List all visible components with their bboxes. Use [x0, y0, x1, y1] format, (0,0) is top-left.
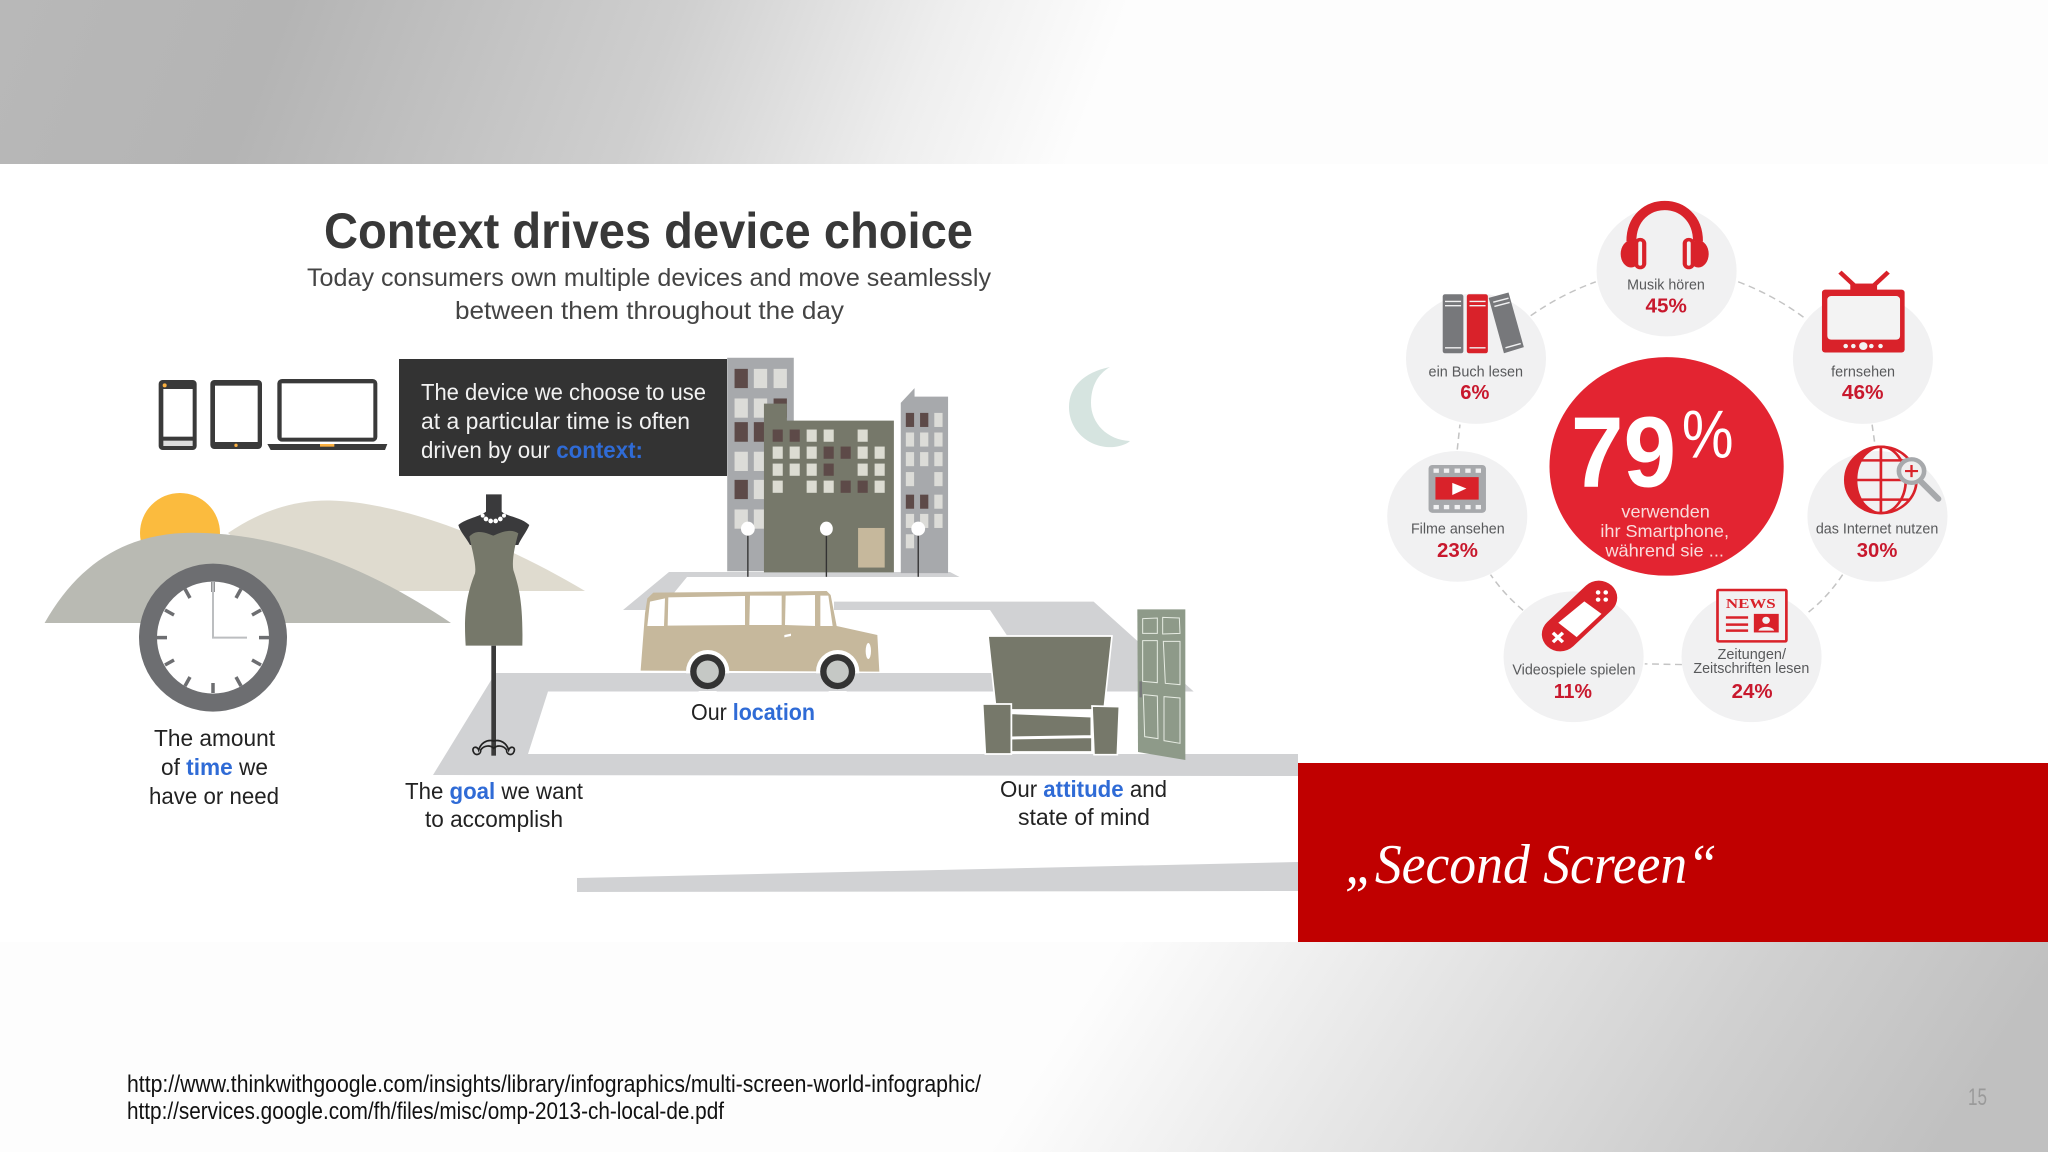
icon: globe with magnifier	[1845, 446, 1938, 514]
icon: television	[1822, 272, 1905, 352]
icon: moon	[1069, 367, 1130, 447]
text: goal	[405, 778, 584, 832]
icon: game console	[1553, 590, 1608, 642]
icon: dress on mannequin	[458, 494, 529, 756]
callout	[399, 359, 727, 476]
label: tv: fernsehen	[1831, 364, 1895, 380]
center circle: verwenden	[1621, 502, 1710, 521]
label: internet: 30%	[1857, 540, 1897, 562]
icon: film	[1429, 465, 1486, 513]
panel: smartphone usage diagram	[1387, 206, 1947, 722]
subtitle: between them throughout the day	[455, 297, 845, 325]
label: newspapers: Zeitschriften lesen	[1693, 660, 1809, 677]
scene: roads	[433, 572, 1298, 892]
label: book: ein Buch lesen	[1429, 364, 1523, 380]
label: video games: Videospiele spielen	[1512, 662, 1636, 678]
icon: newspaper	[1717, 590, 1786, 641]
label: film: Filme ansehen	[1411, 521, 1505, 537]
text: time: The amount	[154, 725, 276, 751]
label: film	[1411, 521, 1505, 562]
subtitle: Today consumers own multiple devices and move seamlessly	[307, 264, 992, 292]
center circle: ihr Smartphone,	[1600, 522, 1729, 541]
scene: city buildings and lamps	[727, 358, 948, 577]
label: book	[1429, 364, 1523, 404]
label: video games: 11%	[1554, 680, 1592, 703]
icons: phone, tablet, laptop	[159, 379, 387, 450]
center circle	[1549, 357, 1784, 576]
callout: at a particular time is often	[421, 408, 690, 434]
text: time: of time we	[161, 754, 268, 780]
icon: bus	[637, 591, 890, 693]
panel: red second screen banner	[1298, 763, 2048, 942]
subtitle	[307, 264, 992, 325]
label: music	[1627, 277, 1705, 317]
icon: clock	[148, 573, 278, 703]
icon: newspaper: NEWS	[1726, 596, 1776, 612]
source links: http://www.thinkwithgoogle.com/insights/library/infographics/multi-screen-world-infographic/	[127, 1071, 981, 1098]
label: tv	[1831, 364, 1895, 404]
icon: books	[1443, 292, 1524, 353]
text: attitude	[1000, 776, 1167, 830]
panel: red second screen banner: „Second Screen“	[1345, 834, 1717, 896]
label: video games	[1512, 662, 1636, 703]
text: location: Our location	[691, 699, 815, 725]
label: newspapers: 24%	[1732, 680, 1773, 703]
text: goal: The goal we want	[405, 778, 584, 804]
label: newspapers: Zeitungen/	[1717, 647, 1787, 663]
text: attitude: state of mind	[1018, 804, 1150, 830]
bubble backgrounds	[1387, 206, 1947, 722]
source links: http://services.google.com/fh/files/misc/omp-2013-ch-local-de.pdf	[127, 1098, 724, 1125]
center circle: 79	[1571, 396, 1676, 508]
label: book: 6%	[1460, 382, 1489, 404]
callout: The device we choose to use	[421, 379, 706, 405]
icon: headphones	[1621, 206, 1709, 269]
label: music: Musik hören	[1627, 277, 1705, 293]
text: attitude: Our attitude and	[1000, 776, 1167, 802]
page number: 15	[1968, 1084, 1987, 1111]
connectors	[1457, 282, 1875, 665]
label: tv: 46%	[1842, 382, 1884, 404]
center circle: während sie ...	[1604, 541, 1724, 561]
label: internet: das Internet nutzen	[1816, 521, 1938, 537]
icon: armchair	[983, 636, 1119, 755]
source links	[127, 1071, 981, 1125]
label: music: 45%	[1646, 295, 1687, 317]
text: time: have or need	[149, 783, 279, 809]
icon: door	[1137, 609, 1185, 760]
label: newspapers	[1693, 647, 1809, 703]
label: film: 23%	[1437, 540, 1478, 562]
title: Context drives device choice	[324, 203, 973, 259]
scene: sun and hills	[45, 493, 585, 623]
center circle: %	[1682, 396, 1734, 472]
label: internet	[1816, 521, 1938, 562]
text: time	[149, 725, 279, 809]
callout: driven by our context:	[421, 437, 643, 463]
text: goal: to accomplish	[425, 806, 563, 832]
